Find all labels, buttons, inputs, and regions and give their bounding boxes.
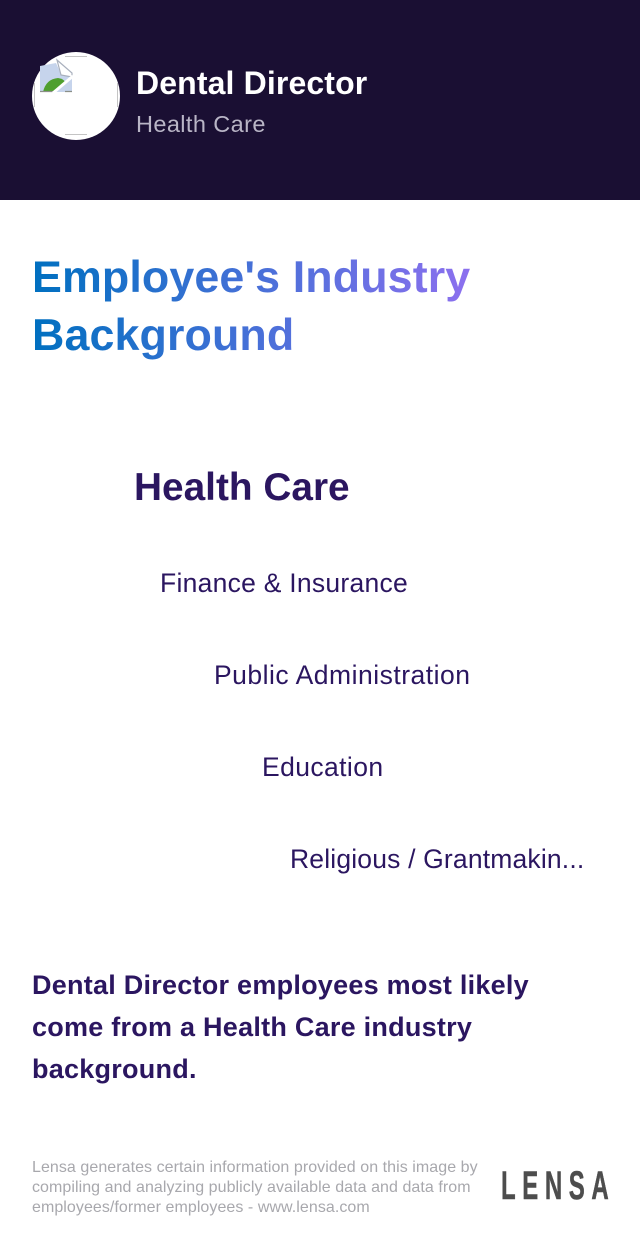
- avatar with broken image icon: [32, 52, 120, 140]
- disclaimer: [32, 1159, 478, 1216]
- disclaimer: compiling and analyzing publicly available data and data from: [32, 1179, 471, 1196]
- summary text: Dental Director employees most likely: [32, 970, 529, 1000]
- disclaimer: employees/former employees - www.lensa.com: [32, 1199, 370, 1216]
- summary text: come from a Health Care industry: [32, 1012, 472, 1042]
- Lensa logo: LENSA: [501, 1164, 615, 1208]
- industry 5: Religious / Grantmakin...: [290, 844, 584, 874]
- section heading: Employee's Industry: [32, 252, 470, 302]
- summary text: background.: [32, 1054, 197, 1084]
- header band: [0, 0, 640, 200]
- disclaimer: Lensa generates certain information provided on this image by: [32, 1159, 478, 1176]
- industry 2: Finance & Insurance: [160, 568, 408, 598]
- job title: Dental Director: [136, 65, 367, 101]
- job industry: Health Care: [136, 111, 266, 137]
- top industry: Health Care: [134, 466, 350, 509]
- section heading: [32, 248, 512, 364]
- section heading: Background: [32, 310, 294, 360]
- summary text: [32, 970, 529, 1084]
- industry ranking list: [134, 466, 584, 874]
- industry 3: Public Administration: [214, 660, 470, 690]
- industry 4: Education: [262, 752, 383, 782]
